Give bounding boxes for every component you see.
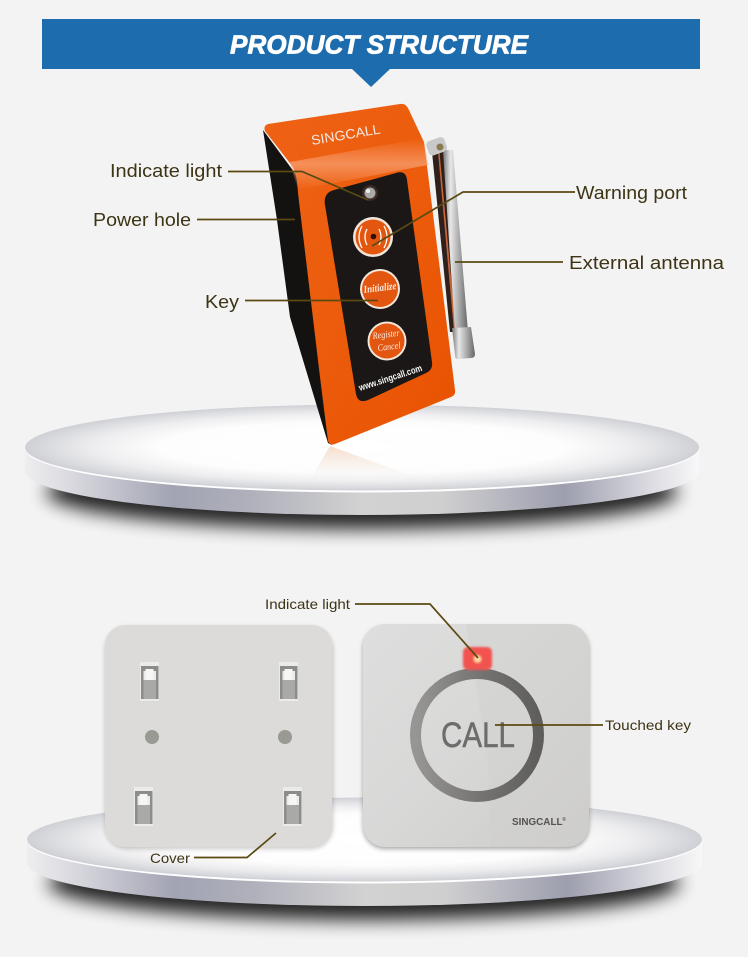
brand: SINGCALL — [310, 122, 382, 148]
ring — [416, 674, 538, 796]
label: touched key: Touched key — [605, 717, 691, 733]
panel: call button — [363, 624, 589, 849]
gloss band — [290, 138, 428, 190]
website: www.singcall.com — [357, 363, 424, 394]
orange body — [264, 104, 455, 445]
leader lines — [194, 172, 603, 858]
antenna — [425, 136, 475, 359]
black face panel — [325, 172, 432, 401]
button: initialize — [360, 269, 400, 309]
clip: top left — [140, 662, 159, 701]
label: warning port: Warning port — [576, 182, 687, 203]
clip: bottom left — [134, 787, 153, 826]
black side — [263, 130, 332, 445]
label: indicate light: Indicate light — [110, 161, 222, 181]
button: initialize: Initialize — [362, 281, 397, 296]
panel: cover — [105, 625, 333, 849]
brand: SINGCALL — [512, 816, 566, 828]
screw hole: left — [145, 730, 159, 744]
device: pager — [263, 104, 455, 445]
brand: ® — [563, 816, 566, 823]
red light — [463, 647, 492, 670]
button: register cancel: Cancel — [377, 341, 401, 354]
call label: CALL — [441, 716, 515, 755]
label: cover: Cover — [150, 850, 190, 866]
banner: product structure — [42, 19, 700, 87]
clip: bottom right — [283, 787, 302, 826]
button: register cancel — [368, 322, 406, 360]
title: PRODUCT STRUCTURE — [230, 30, 529, 60]
label: external antenna: External antenna — [569, 252, 725, 273]
platform: bottom — [27, 798, 702, 920]
button: register cancel: Register — [371, 329, 400, 342]
label: power hole: Power hole — [93, 209, 191, 230]
label: key: Key — [205, 291, 240, 312]
screw hole: right — [278, 730, 292, 744]
platform: top — [25, 404, 699, 529]
clip: top right — [279, 662, 298, 701]
label: indicate light (call button): Indicate light — [265, 596, 350, 612]
button: warning port — [353, 217, 393, 257]
glossy sheen — [466, 624, 589, 847]
indicator light — [362, 185, 378, 201]
